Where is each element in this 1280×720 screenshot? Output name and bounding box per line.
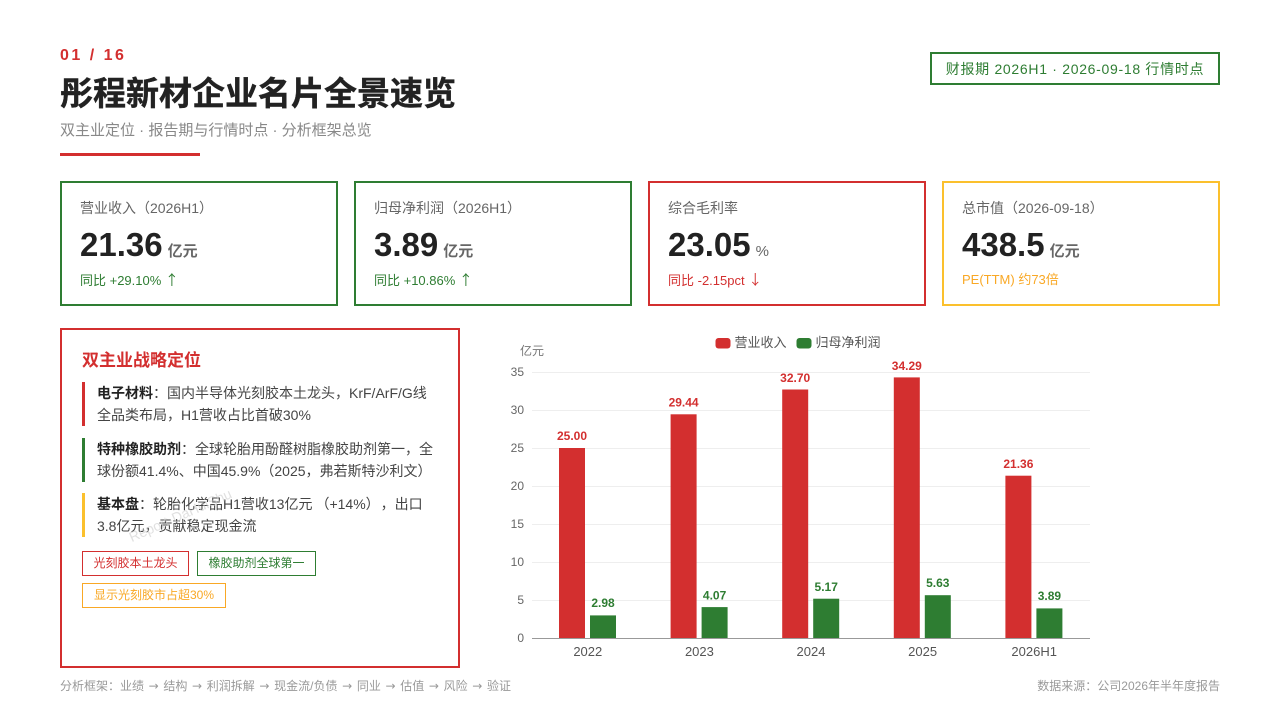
footer: analysis framework: → <box>342 679 352 693</box>
KPI change: PE(TTM) 约73倍 <box>962 272 1059 287</box>
KPI value: 3.89 亿元 <box>374 226 473 263</box>
KPI card: revenue <box>60 181 338 306</box>
revenue value labels: 32.70 <box>780 371 811 385</box>
item: rubber additives: 特种橡胶助剂：全球轮胎用酚醛树脂橡胶助剂第一，全 <box>97 441 433 457</box>
net profit bars <box>590 595 1062 638</box>
net profit value labels <box>591 576 1061 610</box>
y axis labels: 15 <box>511 517 524 531</box>
item: electronic materials <box>82 382 438 426</box>
KPI value: 21.36 亿元 <box>80 226 198 263</box>
KPI label: 营业收入（2026H1） <box>80 200 213 216</box>
footer: analysis framework: 分析框架：业绩 结构 利润拆解 现金流/负债 同业 估值 风险 验证 <box>60 679 511 693</box>
net profit value labels: 3.89 <box>1038 589 1061 603</box>
x axis labels: 2022 <box>573 644 602 659</box>
KPI label: 归母净利润（2026H1） <box>374 200 521 216</box>
legend: 归母净利润 <box>816 335 881 350</box>
watermark: Report·DaHuiShu <box>126 485 234 545</box>
y axis unit: 亿元 <box>520 343 544 358</box>
legend: 营业收入 <box>734 335 787 350</box>
page number: 01 / 16 <box>60 47 126 64</box>
KPI value: 438.5 亿元 <box>962 226 1080 263</box>
item: rubber additives: 球份额41.4%、中国45.9%（2025，弗若斯特沙利文） <box>97 463 432 479</box>
KPI label: 总市值（2026-09-18） <box>962 200 1104 216</box>
KPI value: 23.05 % <box>668 226 769 263</box>
net profit value labels: 4.07 <box>703 588 727 602</box>
item: rubber additives <box>82 438 438 482</box>
title: 彤程新材企业名片全景速览 <box>60 75 456 112</box>
footer: analysis framework: → <box>192 679 202 693</box>
item: base business: 基本盘：轮胎化学品H1营收13亿元（+14%） ，出口 <box>97 496 423 512</box>
KPI change: 同比 +10.86% ↑ <box>374 270 473 290</box>
y axis labels: 30 <box>511 403 524 417</box>
revenue bars <box>559 377 1031 638</box>
x axis labels: 2024 <box>797 644 825 659</box>
item: electronic materials: 全品类布局，H1营收占比首破30% <box>97 407 311 423</box>
y axis labels: 35 <box>511 365 524 379</box>
tag: additives leader: 橡胶助剂全球第一 <box>208 556 304 570</box>
item: base business: 3.8亿元，贡献稳定现金流 <box>97 518 256 534</box>
footer: analysis framework: → <box>259 679 269 693</box>
panel heading: 双主业战略定位 <box>82 351 201 370</box>
title accent rule <box>60 153 200 156</box>
x axis labels: 2025 <box>908 644 937 659</box>
footer: analysis framework: → <box>472 679 482 693</box>
net profit value labels: 5.17 <box>815 580 838 594</box>
y axis labels <box>511 365 524 645</box>
net profit value labels: 5.63 <box>926 576 950 590</box>
revenue value labels: 29.44 <box>669 396 699 410</box>
footer: analysis framework: → <box>385 679 396 693</box>
tag: photoresist leader: 光刻胶本土龙头 <box>93 556 178 570</box>
report period badge <box>930 52 1220 85</box>
net profit value labels: 2.98 <box>591 596 615 610</box>
tag: photoresist leader <box>82 551 189 576</box>
KPI change: 同比 +29.10% ↑ <box>80 270 179 290</box>
y axis labels: 0 <box>517 631 524 645</box>
x axis line <box>532 638 1090 640</box>
item: base business <box>82 493 438 537</box>
subtitle: 双主业定位 · 报告期与行情时点 · 分析框架总览 <box>60 122 372 139</box>
x axis labels: 2026H1 <box>1011 644 1057 659</box>
revenue value labels: 21.36 <box>1003 457 1034 471</box>
tag: display photoresist share <box>82 583 226 608</box>
footer: data source: 数据来源：公司2026年半年度报告 <box>1037 679 1220 693</box>
tag: display photoresist share: 显示光刻胶市占超30% <box>94 588 214 602</box>
revenue value labels: 34.29 <box>892 359 922 373</box>
tag: additives leader <box>197 551 316 576</box>
KPI card: gross margin <box>648 181 926 306</box>
y axis labels: 10 <box>511 555 524 569</box>
legend <box>716 335 881 350</box>
KPI card: net profit <box>354 181 632 306</box>
KPI change: 同比 -2.15pct ↓ <box>668 270 762 290</box>
item: electronic materials: 电子材料：国内半导体光刻胶本土龙头，KrF/ArF/G线 <box>97 385 427 401</box>
x axis labels: 2023 <box>685 644 714 659</box>
y axis labels: 5 <box>517 593 524 607</box>
KPI card: market cap <box>942 181 1220 306</box>
revenue value labels <box>557 359 1034 471</box>
KPI label: 综合毛利率 <box>668 200 738 216</box>
y axis labels: 20 <box>511 479 524 493</box>
x axis labels <box>573 644 1057 659</box>
footer: analysis framework: → <box>149 679 159 693</box>
panel: dual business positioning <box>60 328 460 668</box>
y axis labels: 25 <box>511 441 524 455</box>
footer: analysis framework: → <box>429 679 439 693</box>
revenue value labels: 25.00 <box>557 429 587 443</box>
report period badge: 财报期 2026H1 · 2026-09-18 行情时点 <box>946 61 1204 77</box>
